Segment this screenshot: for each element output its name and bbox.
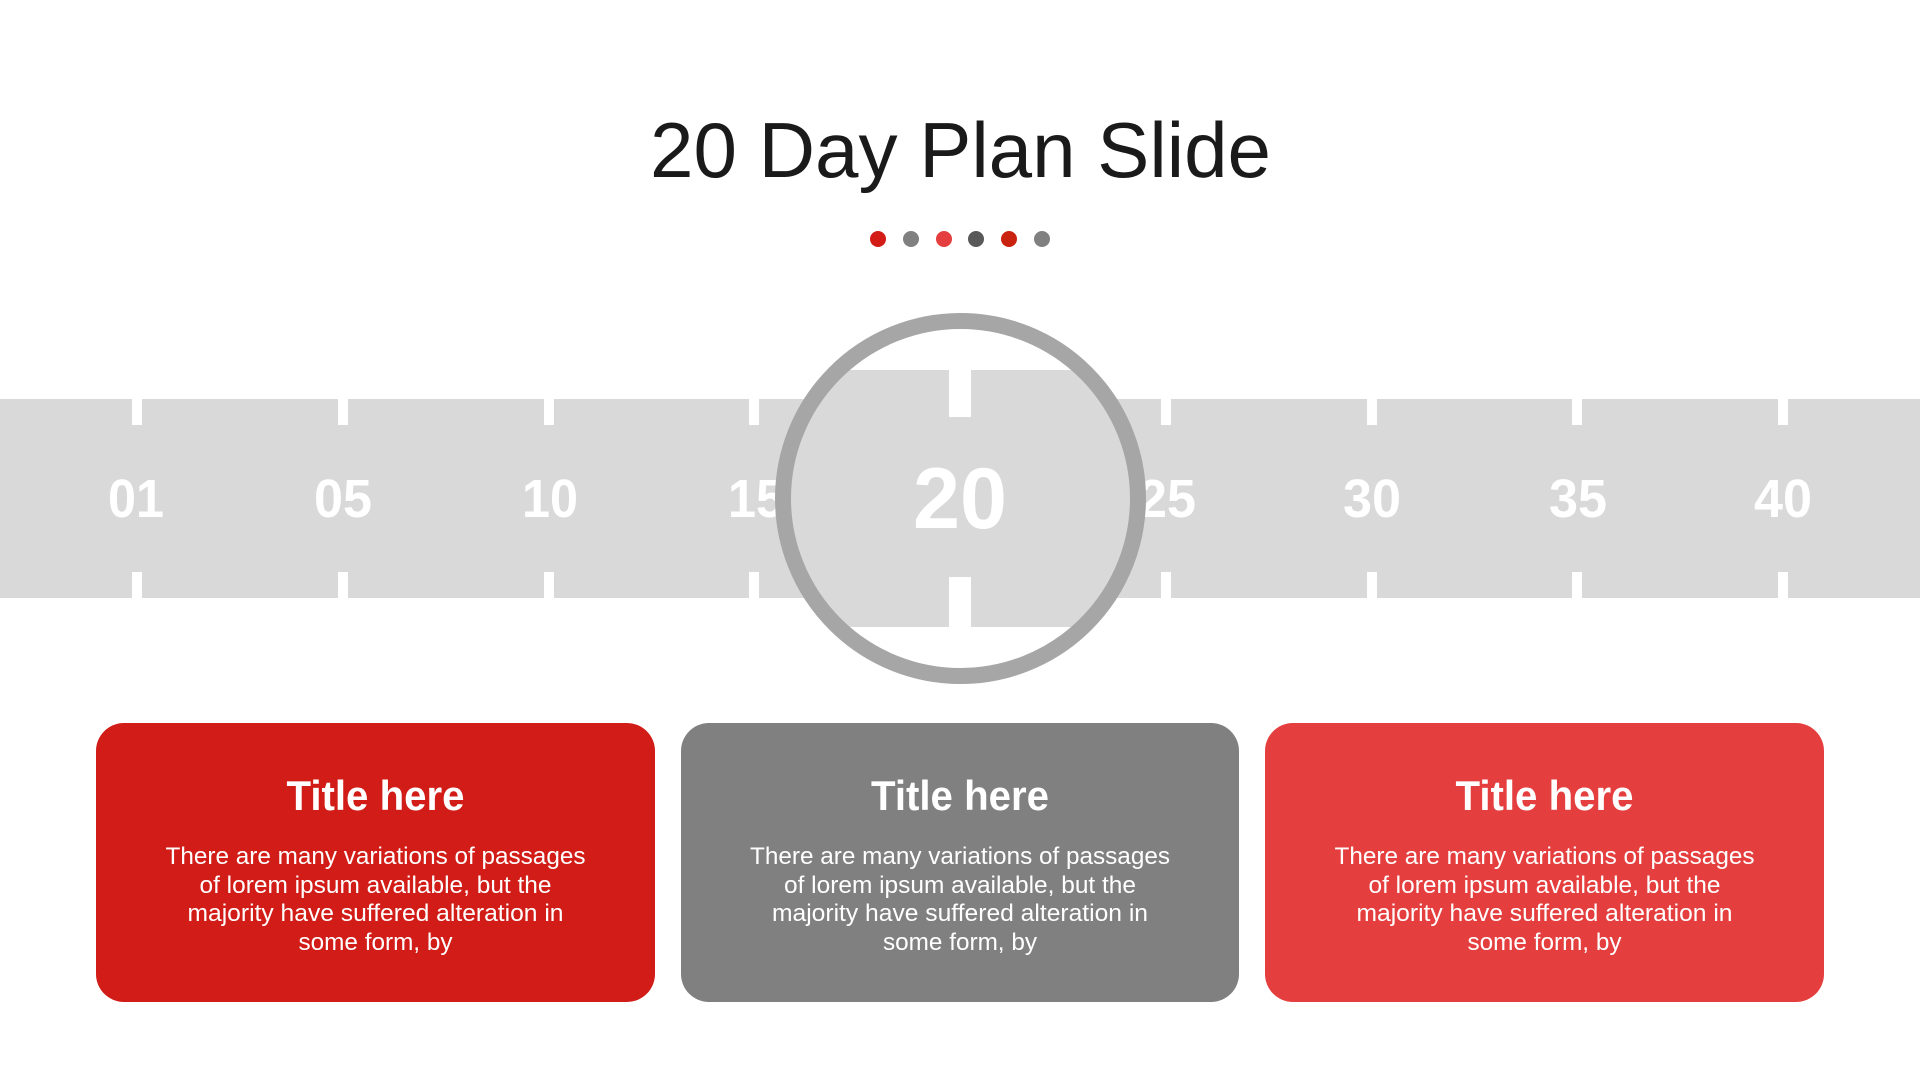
card: red: There are many variations of passages [166,843,586,870]
card: grey: majority have suffered alteration in [772,900,1148,927]
card: light red: Title here [1456,772,1634,819]
day numbers: 25 [1138,469,1196,529]
card: red: Title here [286,772,464,819]
card: light red: There are many variations of passages [1334,843,1754,870]
title: 20 Day Plan Slide [650,106,1271,194]
day numbers: 01 [108,469,164,529]
decorative dot row [870,231,1050,247]
timeline band [0,399,1920,598]
day numbers: 10 [522,469,578,529]
card: light red [1265,723,1824,1002]
card: red [96,723,655,1002]
day 20 number: 20 [913,451,1007,547]
card: light red: some form, by [1468,929,1622,956]
card: red: of lorem ipsum available, but the [200,872,552,899]
day numbers [108,469,1812,529]
card: grey: There are many variations of passages [750,843,1170,870]
day numbers: 15 [728,469,784,529]
card: light red: of lorem ipsum available, but the [1368,872,1720,899]
card: grey [681,723,1239,1002]
card: red: some form, by [298,929,452,956]
day numbers: 05 [314,469,372,529]
card: light red: majority have suffered alteration in [1356,900,1732,927]
card: grey: Title here [871,772,1049,819]
day numbers: 40 [1754,469,1812,529]
day numbers: 35 [1549,469,1607,529]
card: red: majority have suffered alteration in [188,900,564,927]
magnified day 20 circle [760,320,1160,676]
card: grey: some form, by [883,929,1037,956]
card: grey: of lorem ipsum available, but the [784,872,1136,899]
day numbers: 30 [1343,469,1401,529]
